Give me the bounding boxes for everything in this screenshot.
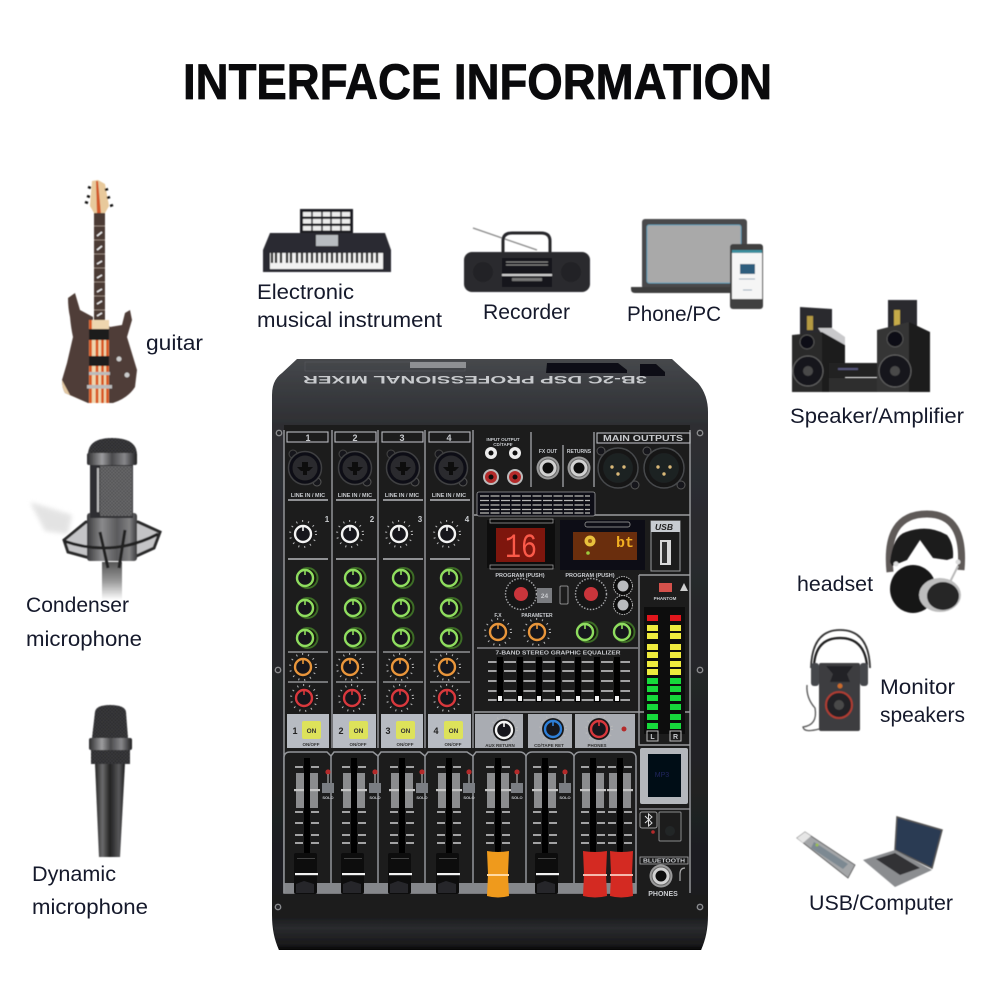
on/off panels: ON (354, 728, 364, 735)
cd/tape rca sockets (483, 437, 523, 485)
icon: guitar (62, 180, 137, 403)
mixer body (272, 359, 708, 950)
phones jack: PHONES (648, 891, 678, 898)
label: condenser microphone: Condenser (26, 594, 129, 617)
eq knobs green (297, 568, 462, 648)
fader caps red (583, 851, 633, 898)
top edge connectors: 3B-2C DSP PROFESSIONAL MIXER (303, 373, 647, 385)
fx out and returns jacks (536, 449, 592, 480)
effects table (477, 492, 595, 516)
top edge connectors (303, 362, 665, 385)
icon: laptop and phone (631, 219, 763, 309)
program knobs: PROGRAM (PUSH) (495, 573, 545, 579)
bluetooth controls: BLUETOOTH (643, 858, 686, 864)
fx display 16 (487, 519, 555, 569)
gain knobs: 3 (418, 515, 423, 524)
on/off panels: ON (401, 728, 411, 735)
icon: dynamic microphone (89, 705, 132, 857)
on/off panels: ON/OFF (396, 742, 414, 747)
phones jack (648, 864, 685, 898)
channel dividers (284, 430, 690, 893)
bluetooth screen (640, 748, 688, 804)
aux return, cd tape and phones panels: CD/TAPE RET (534, 743, 564, 748)
channel number labels: 4 (446, 433, 452, 443)
cd/tape rca sockets: CD/TAPE (493, 442, 513, 447)
label: electronic musical instrument: Electronic (257, 281, 354, 304)
line in labels (288, 493, 470, 559)
label: dynamic microphone (32, 863, 148, 919)
label: recorder: Recorder (483, 301, 570, 324)
on/off panels: ON (307, 728, 317, 735)
phantom power and level meter: L (650, 734, 655, 741)
phantom power and level meter (639, 575, 690, 745)
icon: electronic keyboard (263, 209, 391, 272)
channel number labels: 1 (305, 433, 311, 443)
rep and step buttons (614, 576, 632, 614)
usb port: USB (655, 522, 673, 532)
line in labels: LINE IN / MIC (338, 493, 372, 499)
line in labels: LINE IN / MIC (291, 493, 325, 499)
icon: usb stick and laptop (797, 817, 942, 887)
channel number labels: 2 (352, 433, 358, 443)
usb port (651, 521, 680, 571)
icon: condenser microphone (30, 438, 160, 600)
icon: headset (889, 514, 962, 613)
high and low knobs green (577, 622, 634, 642)
program knobs (495, 573, 615, 610)
phantom power and level meter: R (673, 734, 678, 741)
channel number labels: 3 (399, 433, 405, 443)
label: condenser microphone (26, 594, 142, 651)
main outputs (597, 433, 690, 489)
on/off panels: ON (449, 728, 459, 735)
aux return, cd tape and phones panels (475, 714, 635, 748)
fader cap orange (487, 851, 509, 898)
fx out and returns jacks: RETURNS (567, 449, 592, 455)
program knobs: 24 (541, 593, 548, 600)
label: phone/pc: Phone/PC (627, 303, 721, 326)
channel number labels (287, 432, 470, 443)
icon: radio recorder (464, 228, 590, 292)
label: headset: headset (797, 573, 873, 596)
fx and parameter knobs orange (485, 613, 553, 645)
fx and parameter knobs orange: PARAMETER (521, 613, 553, 619)
label: electronic musical instrument (257, 281, 442, 332)
label: electronic musical instrument: musical instrument (257, 309, 442, 332)
cd/tape rca sockets: INPUT OUTPUT (486, 437, 520, 442)
line in labels: LINE IN / MIC (385, 493, 419, 499)
pan knobs red (291, 685, 460, 711)
label: guitar: guitar (146, 332, 203, 355)
main outputs: MAIN OUTPUTS (603, 434, 684, 443)
label: condenser microphone: microphone (26, 628, 142, 651)
gain knobs (290, 515, 470, 547)
label: monitor speakers (880, 676, 965, 727)
label: dynamic microphone: microphone (32, 896, 148, 919)
aux return, cd tape and phones panels: PHONES (587, 743, 607, 748)
mp3 display: bt (616, 535, 634, 552)
bluetooth controls (639, 809, 690, 864)
on/off panels: ON/OFF (444, 742, 462, 747)
icon: monitor speaker with headphones (803, 630, 870, 731)
bluetooth screen: MP3 (655, 772, 669, 779)
mp3 display (560, 520, 645, 570)
label: dynamic microphone: Dynamic (32, 863, 116, 886)
label: monitor speakers: Monitor (880, 676, 955, 699)
on/off panels: 3 (385, 726, 391, 736)
on/off panels: ON/OFF (302, 742, 320, 747)
gain knobs: 2 (370, 515, 375, 524)
program knobs: PROGRAM (PUSH) (565, 573, 615, 579)
on/off panels: 2 (338, 726, 344, 736)
phantom power and level meter: PHANTOM (654, 596, 677, 601)
label: monitor speakers: speakers (880, 704, 965, 727)
title: INTERFACE INFORMATION (183, 54, 772, 110)
aux knobs orange (288, 652, 470, 682)
screws (275, 430, 703, 910)
on/off panels (287, 714, 471, 748)
fx display 16: 16 (505, 530, 537, 568)
graphic equalizer (477, 648, 638, 702)
fader section (284, 752, 636, 894)
label: speaker/amplifier: Speaker/Amplifier (790, 405, 964, 428)
aux return, cd tape and phones panels: AUX RETURN (485, 743, 515, 748)
on/off panels: 1 (292, 726, 298, 736)
mixer (272, 359, 708, 950)
gain knobs: 4 (465, 515, 470, 524)
on/off panels: ON/OFF (350, 742, 367, 747)
on/off panels: 4 (433, 726, 439, 736)
combo inputs (288, 450, 468, 486)
label: usb/computer: USB/Computer (809, 892, 953, 915)
fx out and returns jacks: FX OUT (539, 449, 557, 455)
line in labels: LINE IN / MIC (432, 493, 466, 499)
icon: speakers and amplifier (792, 300, 930, 392)
graphic equalizer: 7-BAND STEREO GRAPHIC EQUALIZER (496, 650, 621, 656)
fx and parameter knobs orange: F.X (494, 613, 502, 619)
gain knobs: 1 (325, 515, 330, 524)
